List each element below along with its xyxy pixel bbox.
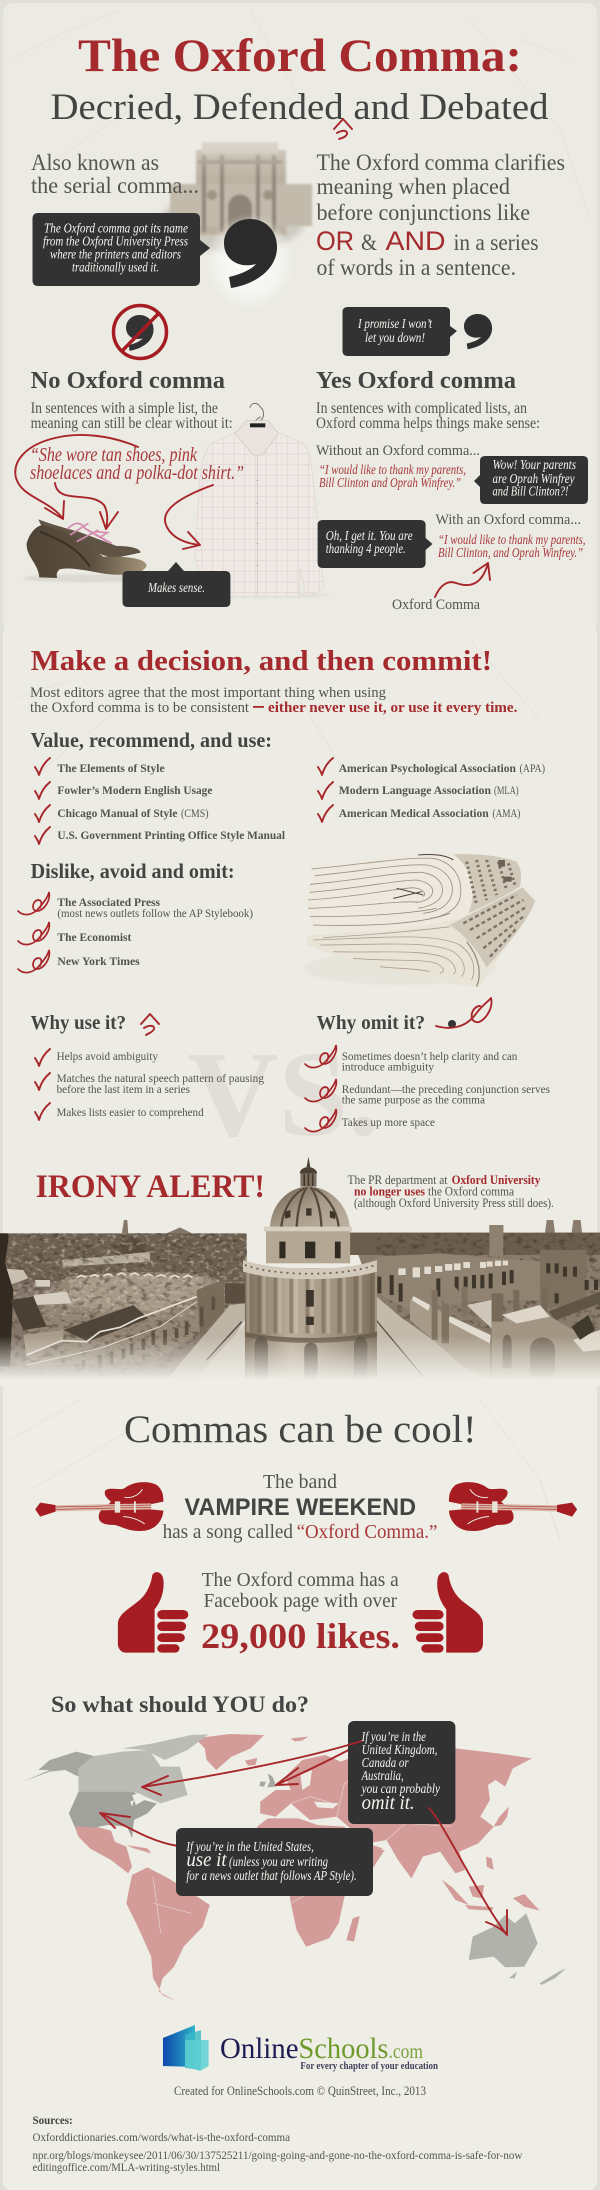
list: reasons to use: before the last item in a series	[57, 1082, 190, 1096]
map region: Madagascar and islands	[346, 1807, 540, 1942]
map region: Alaska	[23, 1752, 94, 1782]
list: reasons to omit: Redundant—the preceding conjunction serves	[342, 1082, 550, 1096]
text: the serial comma: the serial comma...	[31, 173, 199, 198]
callout: omit it: you can probably	[360, 1782, 441, 1797]
heading: irony alert: IRONY ALERT!	[36, 1169, 265, 1205]
callout: thanking 4 people: Oh, I get it. You are	[326, 529, 413, 544]
map seas: Baltic, Black Sea, Caspian	[300, 1770, 373, 1820]
list: style guides that use it, right: (MLA)	[494, 783, 519, 797]
callout: omit it: Australia,	[361, 1769, 404, 1784]
text: PR department note: (although Oxford University Press still does).	[354, 1196, 554, 1210]
title: The Oxford Comma:	[78, 30, 522, 82]
logo: OnlineSchools.com: Online	[220, 2032, 298, 2065]
text: consistency advice: Most editors agree that the most important thing when using	[30, 685, 386, 701]
list: reasons to use	[35, 1049, 264, 1120]
list: style guides that use it, left	[35, 758, 286, 844]
heading: so what should you do: So what should YOU do?	[51, 1692, 309, 1717]
quotation: without comma	[319, 462, 466, 490]
callout: I promise: I promise I won’t	[357, 317, 433, 332]
watermark: VS: VS.	[188, 1027, 380, 1162]
heading: why use it: Why use it?	[31, 1012, 126, 1034]
list: reasons to omit: the same purpose as the comma	[342, 1092, 486, 1106]
panel: footer	[32, 2025, 523, 2174]
callout: name origin	[32, 213, 210, 286]
callout: omit it: If you’re in the	[361, 1730, 426, 1745]
arrow: to the Oxford comma	[435, 563, 490, 597]
quotation: without comma: Bill Clinton and Oprah Winfrey.”	[319, 475, 461, 490]
text: without an Oxford comma: Without an Oxford comma...	[316, 443, 480, 459]
lower newspaper	[307, 887, 535, 987]
icon: insert comma mark	[141, 1014, 159, 1035]
text: clarifies meaning	[316, 150, 565, 280]
list: reasons to omit: Sometimes doesn’t help clarity and can	[342, 1049, 517, 1063]
text: credit: Created for OnlineSchools.com © QuinStreet, Inc., 2013	[174, 2083, 426, 2098]
callout: makes sense: Makes sense.	[147, 581, 205, 596]
callout: omit it: omit it.	[362, 1792, 415, 1814]
list: outlets that omit it	[18, 892, 253, 973]
callout: thanking 4 people: thanking 4 people.	[326, 542, 406, 557]
text: Facebook fact: The Oxford comma has a	[202, 1570, 399, 1591]
list: style guides that use it, right	[318, 758, 545, 822]
heading: no Oxford comma: No Oxford comma	[31, 368, 225, 394]
icon: left guitar	[35, 1482, 163, 1531]
list: outlets that omit it: (most news outlets follow the AP Stylebook)	[57, 906, 253, 920]
list: outlets that omit it: New York Times	[57, 954, 140, 968]
heading: make a decision: Make a decision, and then commit!	[31, 646, 492, 677]
icon: comma	[464, 314, 492, 349]
list: style guides that use it, left: The Elements of Style	[57, 761, 165, 775]
text: Facebook fact	[201, 1570, 400, 1656]
icon: prohibited comma	[114, 306, 166, 358]
logo: OnlineSchools.com: Schools	[298, 2032, 388, 2065]
map region: Greenland and Iceland	[195, 1734, 308, 1770]
list: reasons to use: Matches the natural speech pattern of pausing	[57, 1071, 264, 1085]
callout: use it: (unless you are writing	[229, 1855, 328, 1870]
list: reasons to omit: introduce ambiguity	[342, 1060, 434, 1074]
heading: value, recommend, and use: Value, recommend, and use:	[31, 728, 272, 752]
text: also known as: Also known as	[31, 150, 159, 175]
text: clarifies meaning: AND	[386, 226, 446, 256]
text: Vampire Weekend fact: VAMPIRE WEEKEND	[184, 1494, 416, 1521]
list: style guides that use it, right: Modern Language Association	[339, 783, 491, 797]
callout: use it: If you’re in the United States,	[186, 1840, 314, 1855]
list: style guides that use it, left: U.S. Government Printing Office Style Manual	[57, 828, 286, 842]
callout: use it: for a news outlet that follows AP Style).	[186, 1869, 357, 1884]
label: Oxford Comma: Oxford Comma	[392, 597, 480, 613]
callout: I promise	[342, 307, 457, 356]
map region: Australia and New Zealand	[469, 1913, 566, 1985]
map region: Eurasia	[260, 1748, 532, 1878]
icon: right guitar	[449, 1482, 577, 1531]
icon: red insert comma mark	[334, 119, 352, 139]
list: style guides that use it, left: Fowler’s Modern English Usage	[57, 783, 213, 797]
quotation: shoes sentence: “She wore tan shoes, pink	[30, 444, 198, 466]
text: sources: Sources:	[32, 2113, 73, 2127]
list: reasons to omit: Takes up more space	[342, 1115, 435, 1129]
text: sources: npr.org/blogs/monkeysee/2011/06/30/137525211/going-going-and-gone-no-the-oxford-comma-is-safe-for-now	[32, 2148, 523, 2162]
arrows: map pointers	[100, 1741, 362, 1846]
list: outlets that omit it: The Economist	[57, 930, 131, 944]
callout: omit it: United Kingdom,	[362, 1743, 437, 1758]
callout: omit it	[348, 1721, 455, 1824]
text: PR department note: Oxford University	[452, 1173, 541, 1187]
text: PR department note: no longer uses	[354, 1184, 425, 1198]
text: sources	[32, 2113, 523, 2174]
text: clarifies meaning: before conjunctions like	[316, 200, 530, 225]
quotation: without comma: “I would like to thank my parents,	[319, 462, 466, 477]
illustration: Oxford skyline with Radcliffe Camera	[0, 1157, 600, 1386]
heading: dislike, avoid and omit: Dislike, avoid and omit:	[31, 859, 235, 883]
icon: right thumbs up	[413, 1572, 483, 1653]
arrows: from quotation to shoes and shirt	[15, 435, 213, 549]
logo icon: open book	[163, 2025, 209, 2071]
logo: OnlineSchools.com	[163, 2025, 438, 2072]
list: outlets that omit it: The Associated Press	[57, 895, 160, 909]
callout: name origin: traditionally used it.	[72, 260, 159, 274]
callout: wow your parents: and Bill Clinton?!	[492, 484, 569, 500]
map region: Africa	[256, 1818, 385, 1947]
callout: I promise: let you down!	[365, 331, 425, 346]
text: clarifies meaning: in a series	[454, 230, 539, 255]
text: complicated list explanation: In sentences with complicated lists, an	[316, 400, 527, 417]
list: style guides that use it, right: (APA)	[520, 761, 545, 775]
panel: make a decision	[18, 646, 550, 1162]
list: style guides that use it, left: Chicago Manual of Style	[57, 806, 178, 820]
text: sources: Oxforddictionaries.com/words/what-is-the-oxford-comma	[32, 2130, 291, 2144]
quotation: shoes sentence	[30, 444, 244, 484]
text: Vampire Weekend fact: The band	[263, 1471, 337, 1493]
list: style guides that use it, left: (CMS)	[181, 806, 209, 820]
map region: Britain	[259, 1773, 276, 1787]
panel: introduction	[31, 30, 565, 310]
map region: Mexico and Central America	[75, 1827, 151, 1873]
map region: United States	[69, 1792, 157, 1838]
callout: name origin: The Oxford comma got its name	[44, 220, 188, 236]
logo: OnlineSchools.com: For every chapter of your education	[300, 2061, 438, 2072]
callout: wow your parents: are Oprah Winfrey	[492, 472, 575, 487]
text: clarifies meaning: The Oxford comma clarifies	[316, 150, 565, 175]
chart: world map	[23, 1734, 566, 2002]
map country borders	[153, 1770, 452, 1933]
text: Vampire Weekend fact: “Oxford Comma.”	[297, 1521, 437, 1543]
illustration: plaid shirt	[190, 403, 330, 598]
text: PR department note	[348, 1173, 554, 1210]
text: clarifies meaning: &	[361, 230, 377, 255]
list: reasons to use: Helps avoid ambiguity	[57, 1049, 158, 1063]
illustration: faded Oxford building	[160, 138, 312, 252]
glow behind comma	[206, 214, 294, 310]
text: Facebook fact: 29,000 likes.	[201, 1616, 400, 1656]
callout: name origin: from the Oxford University Press	[43, 234, 188, 248]
list: reasons to use: Makes lists easier to comprehend	[57, 1105, 204, 1119]
callout: wow your parents: Wow! Your parents	[492, 458, 576, 473]
arrow: to Australia	[429, 1808, 507, 1935]
callout: omit it: Canada or	[362, 1756, 409, 1771]
text: Vampire Weekend fact: has a song called	[163, 1521, 293, 1543]
callout: name origin: where the printers and editors	[50, 246, 181, 262]
illustration: folded newspapers	[303, 853, 535, 987]
quotation: shoes sentence: shoelaces and a polka-dot shirt.”	[30, 462, 244, 484]
text: PR department note: The PR department at	[348, 1173, 448, 1187]
quotation: with comma	[438, 532, 586, 560]
text: Facebook fact: Facebook page with over	[204, 1591, 397, 1612]
text: sources: editingoffice.com/MLA-writing-styles.html	[32, 2160, 221, 2174]
callout: use it	[176, 1828, 373, 1896]
map region: Canada	[78, 1734, 209, 1803]
city: right of rotunda	[300, 1220, 600, 1380]
Radcliffe Camera rotunda	[243, 1157, 377, 1383]
text: PR department note: the Oxford comma	[428, 1184, 514, 1198]
callout: thanking 4 people	[318, 520, 432, 568]
callout: makes sense	[122, 562, 230, 607]
bottom fade of skyline	[0, 1336, 600, 1380]
icon: large comma	[224, 219, 277, 288]
map region: South America	[126, 1867, 210, 2002]
icon: comma being struck out	[436, 998, 491, 1028]
text: consistency advice	[30, 685, 518, 716]
map lakes	[130, 1793, 147, 1807]
panel: commas can be cool	[35, 1408, 577, 1656]
panel: irony alert	[36, 1169, 554, 1210]
panel: yes Oxford comma	[316, 307, 588, 613]
callout: use it: use it	[186, 1849, 227, 1871]
text: complicated list explanation: Oxford comma helps things make sense:	[316, 415, 540, 432]
panel: so what should you do	[23, 1692, 566, 2002]
text: simple list explanation: In sentences with a simple list, the	[31, 400, 218, 417]
icon: left thumbs up	[118, 1572, 188, 1653]
text: clarifies meaning: meaning when placed	[316, 174, 510, 199]
list: style guides that use it, right: (AMA)	[492, 806, 520, 820]
subtitle: Decried, Defended and Debated	[50, 87, 549, 128]
illustration: tan shoes with pink laces	[23, 519, 150, 582]
city: left of rotunda	[0, 1220, 253, 1380]
panel: no Oxford comma	[15, 306, 330, 607]
text: Vampire Weekend fact	[163, 1471, 437, 1543]
text: with an Oxford comma: With an Oxford comma...	[436, 512, 581, 528]
list: style guides that use it, right: American Psychological Association	[339, 761, 516, 775]
text: consistency advice: the Oxford comma is to be consistent	[30, 700, 250, 716]
text: clarifies meaning: of words in a sentence.	[316, 255, 516, 280]
text: simple list explanation	[31, 400, 233, 432]
text: complicated list explanation	[316, 400, 540, 432]
list: reasons to omit	[305, 1045, 550, 1132]
text: consistency advice: either never use it, or use it every time.	[268, 700, 518, 716]
list: style guides that use it, right: American Medical Association	[339, 806, 489, 820]
text: simple list explanation: meaning can still be clear without it:	[31, 415, 233, 432]
upper newspaper	[307, 853, 521, 932]
heading: why omit it: Why omit it?	[316, 1012, 425, 1034]
logo: OnlineSchools.com: .com	[388, 2041, 423, 2063]
heading: commas can be cool: Commas can be cool!	[124, 1408, 476, 1451]
text: clarifies meaning: OR	[316, 226, 354, 256]
heading: yes Oxford comma: Yes Oxford comma	[316, 368, 516, 394]
callout: wow your parents	[474, 456, 588, 504]
